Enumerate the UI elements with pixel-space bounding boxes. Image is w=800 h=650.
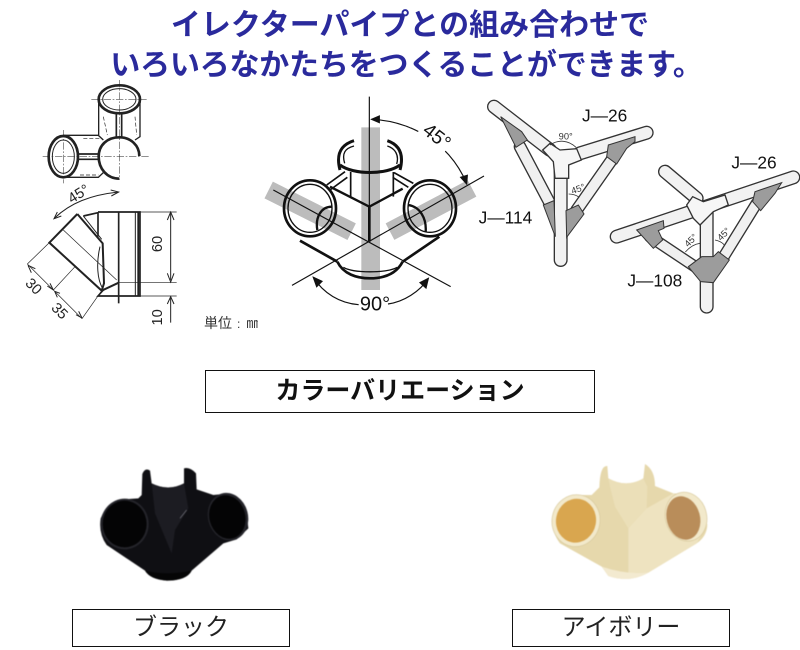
angle label mask — [417, 117, 456, 153]
part labels: J—26 — [582, 105, 627, 125]
angle labels — [559, 131, 733, 249]
angle labels: 45° — [682, 232, 700, 249]
heading: color variation: カラーバリエーション — [275, 377, 525, 405]
title: イレクターパイプとの組み合わせで — [171, 9, 649, 42]
heading: color variation — [205, 370, 595, 413]
label: black: ブラック — [133, 614, 229, 641]
dimension lines and labels — [22, 182, 177, 325]
diagram: assembled pipe frames — [478, 100, 800, 314]
angle labels: 45° — [715, 225, 733, 243]
dimension lines and labels: 60 — [150, 236, 166, 252]
photo: ivory joint — [551, 464, 708, 580]
axis lines and angle arcs — [273, 97, 484, 305]
label: black — [72, 609, 290, 647]
frame with J-108 — [617, 172, 793, 307]
dimension lines and labels: 30 — [22, 276, 44, 298]
frame with J-114 — [494, 107, 647, 260]
diagram: 45 and 90 degree joint — [264, 96, 484, 316]
grey pipe axes — [269, 127, 472, 290]
diagram: 45 and 90 degree joint: 90° — [360, 294, 390, 316]
angle labels: 45° — [570, 182, 587, 196]
part labels — [479, 105, 777, 291]
label: ivory: アイボリー — [562, 614, 680, 641]
angle labels: 45° — [418, 120, 454, 154]
angle labels: 90° — [559, 131, 573, 141]
label: ivory — [512, 609, 730, 647]
diagram: dimensioned drawing — [22, 80, 177, 325]
top view of joint — [43, 80, 149, 183]
dimension lines and labels: 35 — [48, 300, 70, 323]
side view of joint — [27, 212, 140, 319]
title: いろいろなかたちをつくることができます。 — [110, 49, 703, 82]
dimension lines and labels: 10 — [150, 309, 166, 325]
dimension lines and labels: 45° — [65, 182, 93, 207]
part labels: J—108 — [627, 271, 682, 291]
joint body — [284, 141, 456, 278]
photo: black joint — [99, 467, 250, 582]
title — [110, 9, 703, 82]
part labels: J—114 — [479, 207, 533, 227]
part labels: J—26 — [731, 153, 777, 173]
